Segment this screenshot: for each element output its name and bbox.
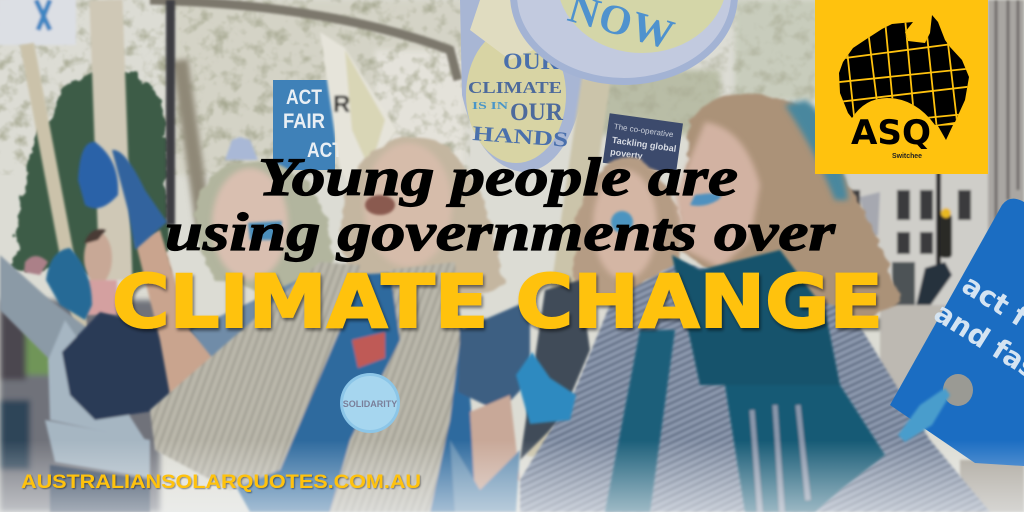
sign: our climate is in our hands: HANDS — [472, 121, 569, 152]
icon: button badge — [340, 373, 400, 433]
sign: our climate is in our hands — [460, 0, 585, 172]
website url: AUSTRALIANSOLARQUOTES.COM.AU — [21, 471, 421, 493]
sign: dark co-operative banner: Tackling global — [611, 135, 677, 154]
sign: dark co-operative banner: The co-operative — [613, 122, 675, 139]
sign: white banner behind act fair — [320, 32, 397, 190]
person: dark sleeve and shirt left — [45, 312, 240, 512]
sign: act fair — [273, 80, 343, 170]
sign: our climate is in our hands: OUR — [510, 99, 564, 126]
person: girl one arm and face — [135, 160, 335, 395]
sign: our climate is in our hands: CLIMATE — [468, 78, 562, 97]
headline: young people are: Young people are — [258, 147, 738, 207]
background: buildings — [838, 0, 1024, 512]
headline: climate change: CLIMATE CHANGE — [112, 260, 883, 345]
person: girl four hair and face — [675, 93, 900, 320]
pole: left placard stick — [27, 44, 87, 361]
sign: act fair: ACT — [286, 86, 322, 109]
person: girl four teal scarf — [605, 250, 885, 512]
sign: act fair: FAIR — [283, 110, 325, 133]
person: man in background left — [0, 229, 117, 380]
icon: blue hand on placard — [898, 388, 950, 442]
lamp post — [166, 0, 175, 225]
sign: dark co-operative banner — [603, 113, 683, 173]
street and lower left background — [0, 300, 160, 512]
sign: white banner behind act fair: R — [333, 91, 350, 118]
bottom white fade — [0, 440, 1024, 512]
sign: act fair: ACT — [307, 139, 343, 162]
sign: our climate is in our hands: IS IN — [472, 100, 508, 112]
icon: australia solar panel map — [839, 15, 969, 140]
sign: top left white with ribbon — [0, 0, 76, 45]
sign: placard pole centre — [541, 80, 596, 458]
icon: blue glove on left pole — [46, 248, 92, 320]
icon: tasmania — [938, 125, 953, 140]
person: girl two with scarf and blue shirt — [150, 135, 530, 512]
logo byline: Switchee — [892, 153, 922, 160]
sign: blue act fair and fast placard — [890, 199, 1024, 466]
logo: ASQ — [815, 0, 988, 174]
sign: our climate is in our hands: OUR — [503, 49, 559, 74]
headline: using governments over: using governments over — [165, 202, 836, 262]
icon: blue glove on centre pole — [516, 352, 576, 424]
icon: blue mittens on wide pole — [78, 142, 167, 250]
person: girl three — [520, 158, 680, 460]
icon: button badge: SOLIDARITY — [343, 399, 397, 409]
person: girl four knit sweater — [520, 262, 990, 512]
pole: wide wooden placard stick — [106, 0, 116, 280]
logo wordmark: ASQ — [851, 113, 931, 153]
sign: dark co-operative banner: poverty — [610, 147, 643, 161]
sign: round now placard — [510, 0, 738, 85]
